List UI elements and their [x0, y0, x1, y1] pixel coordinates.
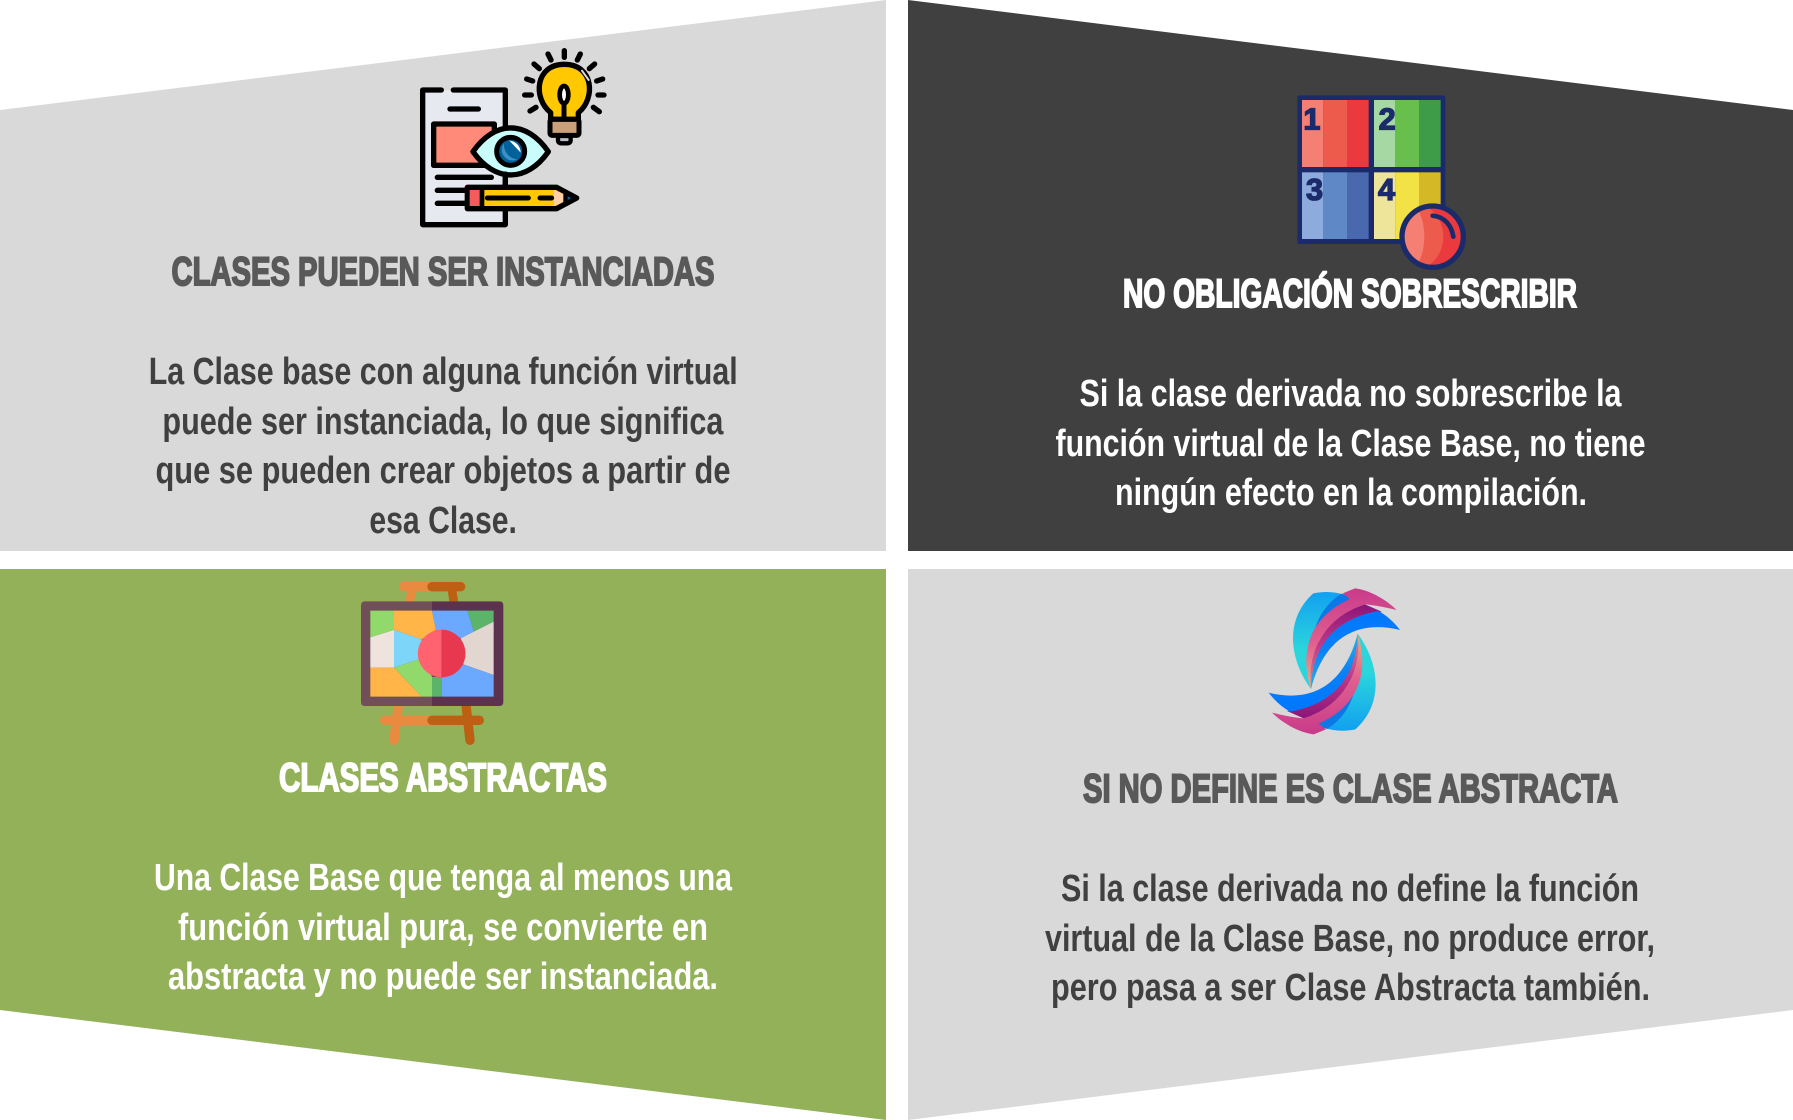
body text: Si la clase derivada no sobrescribe la: [1080, 373, 1622, 415]
icon: numbered colour grid with ball: 1: [1303, 102, 1320, 136]
body text: esa Clase.: [369, 500, 517, 542]
panel: no obligacion sobrescribir: [908, 0, 1793, 551]
body text: Si la clase derivada no define la función: [1061, 868, 1639, 910]
panel background: [0, 0, 886, 551]
body text: función virtual pura, se convierte en: [178, 907, 708, 949]
panel: clases pueden ser instanciadas: [0, 0, 886, 551]
body text: virtual de la Clase Base, no produce error,: [1045, 918, 1655, 960]
icon: numbered colour grid with ball: 4: [1378, 173, 1395, 207]
body text: [149, 351, 738, 542]
icon: document, eye, pencil and light bulb: [423, 51, 604, 225]
body text: abstracta y no puede ser instanciada.: [168, 956, 718, 998]
body text: ningún efecto en la compilación.: [1115, 472, 1587, 514]
panel background: [0, 569, 886, 1120]
icon: numbered colour grid with ball: 2: [1379, 102, 1396, 136]
icon: painting on easel: [361, 587, 503, 740]
body text: [1045, 868, 1655, 1009]
body text: [1056, 373, 1646, 514]
body text: [154, 857, 733, 998]
icon: numbered colour grid with ball: 3: [1306, 173, 1323, 207]
heading: NO OBLIGACIÓN SOBRESCRIBIR: [1123, 270, 1577, 316]
body text: puede ser instanciada, lo que significa: [162, 401, 724, 443]
body text: La Clase base con alguna función virtual: [149, 351, 738, 393]
panel background: [908, 569, 1793, 1120]
heading: CLASES PUEDEN SER INSTANCIADAS: [172, 250, 714, 294]
panel: clases abstractas: [0, 569, 886, 1120]
panel: si no define es clase abstracta: [908, 569, 1793, 1120]
body text: que se pueden crear objetos a partir de: [156, 450, 730, 492]
panel background: [908, 0, 1793, 551]
body text: pero pasa a ser Clase Abstracta también.: [1051, 967, 1650, 1009]
icon: colourful swirl logo: [1269, 588, 1400, 734]
heading: CLASES ABSTRACTAS: [279, 756, 607, 800]
body text: función virtual de la Clase Base, no tiene: [1056, 423, 1646, 465]
icon: numbered colour grid with ball: [1297, 95, 1467, 270]
body text: Una Clase Base que tenga al menos una: [154, 857, 733, 899]
